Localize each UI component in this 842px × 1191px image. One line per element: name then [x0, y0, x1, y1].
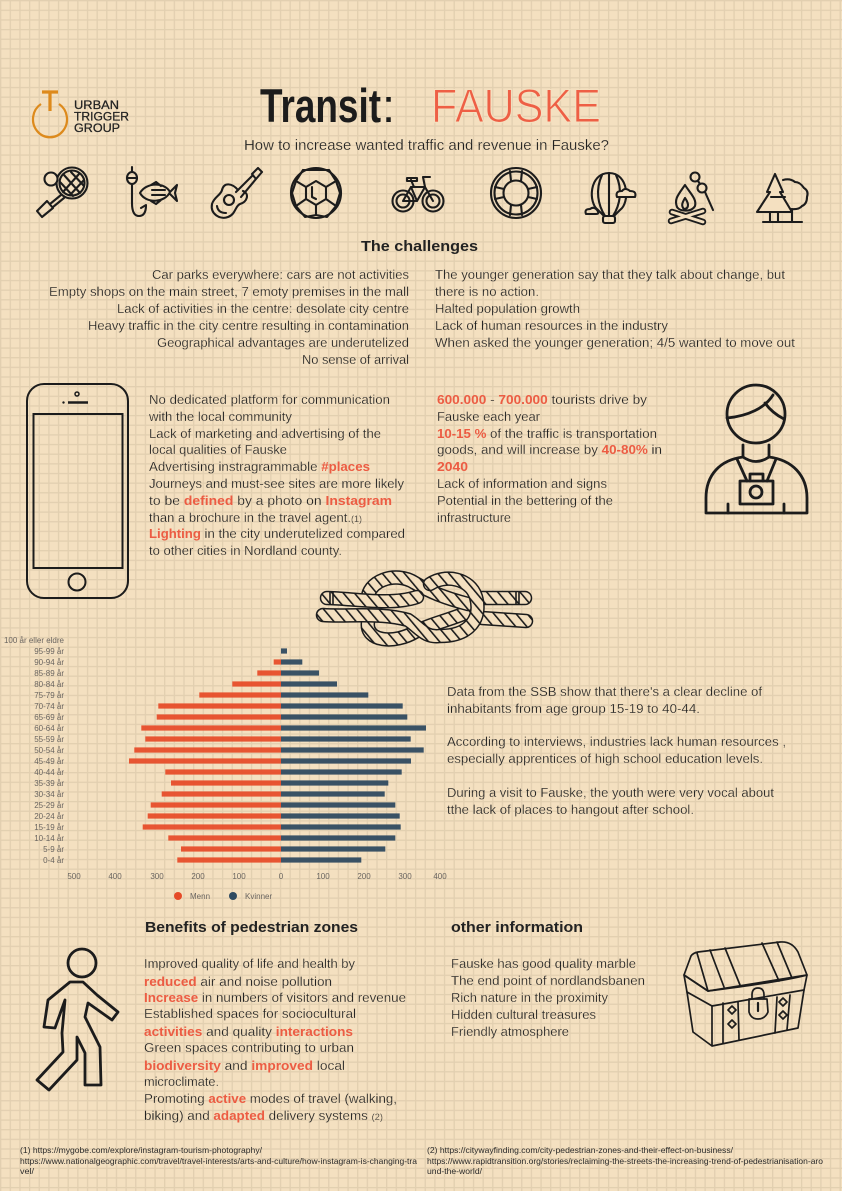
text block: communication: to be defined by a photo on Instagram [149, 493, 392, 508]
text block: challenges right: Lack of human resources in the industry [435, 318, 668, 333]
text block: tourists: 10-15 % of the traffic is transportation [437, 426, 657, 441]
age labels: 40-44 år [34, 768, 64, 777]
age labels: 45-49 år [34, 757, 64, 766]
icon: racket and ball [37, 168, 88, 217]
age labels: 100 år eller eldre [4, 636, 65, 645]
heading: other information: other information [451, 919, 583, 936]
logo: Urban Trigger Group [33, 92, 129, 137]
text block: communication: than a brochure in the travel agent.(1) [149, 510, 362, 525]
text block: challenges left: Lack of activities in the centre: desolate city centre [117, 301, 409, 316]
age labels: 30-34 år [34, 790, 64, 799]
footnotes: sources 1: vel/ [20, 1166, 35, 1176]
icon: pedestrian [37, 949, 118, 1090]
text block: challenges left: Empty shops on the main street, 7 emoty premises in the mall [49, 284, 409, 299]
value axis: 100 [232, 872, 246, 881]
text block: challenges right: Halted population growth [435, 301, 580, 316]
age labels: 65-69 år [34, 713, 64, 722]
value axis: 300 [150, 872, 164, 881]
value axis: 0 [279, 872, 284, 881]
text block: other information: Rich nature in the proximity [451, 990, 608, 1005]
text block: challenges left: Car parks everywhere: cars are not activities [152, 267, 410, 282]
age labels: 80-84 år [34, 680, 64, 689]
text block: challenges right: The younger generation say that they talk about change, but [435, 267, 785, 282]
text block: tourists: Fauske each year [437, 409, 541, 424]
footnotes: sources 2: https://www.rapidtransition.org/stories/reclaiming-the-streets-the-increasing-trend-of-pedestrianisation-aro [427, 1156, 823, 1166]
text block: communication: to other cities in Nordland county. [149, 543, 342, 558]
icon: bicycle [392, 177, 444, 212]
text block: challenges right: there is no action. [435, 284, 539, 299]
text block: challenges right [435, 267, 795, 350]
text block: communication: Journeys and must-see sites are more likely [149, 476, 404, 491]
heading: benefits of pedestrian zones: Benefits of pedestrian zones [145, 919, 358, 936]
text block: challenges left: No sense of arrival [302, 352, 409, 367]
text block: benefits: activities and quality interactions [144, 1024, 353, 1039]
age labels [4, 636, 65, 865]
heading: the challenges: The challenges [361, 238, 478, 255]
legend: Menn [190, 892, 210, 901]
title: Transit [260, 79, 381, 132]
icon: trees [757, 174, 808, 222]
icon: rope knot [323, 578, 526, 639]
text block: chart commentary: especially apprentices of high school education levels. [447, 751, 763, 766]
icon: smartphone [27, 384, 128, 598]
text block: chart commentary: tthe lack of places to hangout after school. [447, 802, 694, 817]
text block: tourists: Lack of information and signs [437, 476, 607, 491]
text block: other information: The end point of nordlandsbanen [451, 973, 645, 988]
logo: Urban Trigger Group: TRIGGER [74, 112, 129, 124]
text block: communication: Advertising instragrammable #places [149, 459, 370, 474]
text block: tourists: 2040 [437, 459, 468, 474]
text block: other information: Fauske has good quality marble [451, 956, 636, 971]
age labels: 0-4 år [43, 856, 64, 865]
age labels: 25-29 år [34, 801, 64, 810]
text block: benefits: Green spaces contributing to urban [144, 1040, 354, 1055]
text block: communication: local qualities of Fauske [149, 442, 287, 457]
chart: population pyramid [4, 636, 447, 901]
text block: benefits: Improved quality of life and health by [144, 956, 355, 971]
age labels: 60-64 år [34, 724, 64, 733]
icon: guitar [212, 168, 262, 218]
age labels: 95-99 år [34, 647, 64, 656]
value axis: 100 [316, 872, 330, 881]
age labels: 55-59 år [34, 735, 64, 744]
icon: football [291, 168, 341, 218]
text block: benefits: Established spaces for sociocultural [144, 1006, 356, 1021]
subtitle: How to increase wanted traffic and revenue in Fauske? [244, 138, 609, 154]
bars: women [281, 648, 426, 863]
text block: benefits [144, 956, 406, 1123]
text block: communication: No dedicated platform for communication [149, 392, 390, 407]
value axis: 200 [191, 872, 205, 881]
icon: fish and hook [127, 167, 177, 216]
text block: challenges right: When asked the younger generation; 4/5 wanted to move out [435, 335, 795, 350]
footnotes: sources 2 [427, 1145, 823, 1176]
footnotes: sources 1: (1) https://mygobe.com/explore/instagram-tourism-photography/ [20, 1145, 263, 1155]
legend [174, 892, 272, 901]
icon: tourist with camera [706, 385, 807, 513]
value axis: 500 [67, 872, 81, 881]
bars: men [129, 659, 281, 863]
age labels: 35-39 år [34, 779, 64, 788]
age labels: 50-54 år [34, 746, 64, 755]
value axis: 200 [357, 872, 371, 881]
icon: lifebuoy [491, 168, 541, 218]
text block: challenges left: Heavy traffic in the city centre resulting in contamination [88, 318, 409, 333]
value axis: 300 [398, 872, 412, 881]
value axis: 400 [433, 872, 447, 881]
text block: tourists [437, 392, 662, 525]
text block: benefits: microclimate. [144, 1074, 219, 1089]
icon: campfire and skewer [671, 172, 713, 222]
text block: communication: Lack of marketing and advertising of the [149, 426, 381, 441]
text block: benefits: reduced air and noise pollution [144, 974, 332, 989]
text block: benefits: biking) and adapted delivery systems (2) [144, 1108, 383, 1123]
text block: chart commentary: According to interviews, industries lack human resources , [447, 734, 786, 749]
text block: communication: Lighting in the city underutelized compared [149, 526, 405, 541]
text block: challenges left [49, 267, 410, 367]
age labels: 85-89 år [34, 669, 64, 678]
age labels: 70-74 år [34, 702, 64, 711]
title [260, 79, 601, 132]
icon: treasure chest [684, 942, 807, 1046]
text block: other information: Friendly atmosphere [451, 1024, 569, 1039]
age labels: 75-79 år [34, 691, 64, 700]
footnotes: sources 2: (2) https://citywayfinding.com/city-pedestrian-zones-and-their-effect-on-business/ [427, 1145, 734, 1155]
footnotes: sources 1 [20, 1145, 417, 1176]
text block: tourists: goods, and will increase by 40-80% in [437, 442, 662, 457]
footnotes: sources 2: und-the-world/ [427, 1166, 483, 1176]
age labels: 5-9 år [43, 845, 64, 854]
text block: tourists: Potential in the bettering of the [437, 493, 613, 508]
title: FAUSKE [431, 79, 601, 132]
legend: Kvinner [245, 892, 272, 901]
title: : [382, 79, 395, 132]
icon: hot air balloon [586, 173, 635, 223]
text block: communication [148, 392, 405, 558]
age labels: 90-94 år [34, 658, 64, 667]
text block: benefits: Increase in numbers of visitors and revenue [144, 990, 406, 1005]
text block: chart commentary [447, 684, 786, 817]
text block: communication: with the local community [148, 409, 292, 424]
text block: challenges left: Geographical advantages are underutelized [157, 335, 409, 350]
value axis: 400 [108, 872, 122, 881]
text block: chart commentary: Data from the SSB show that there's a clear decline of [447, 684, 762, 699]
logo: Urban Trigger Group: URBAN [74, 100, 119, 112]
value axis [67, 872, 447, 881]
logo: Urban Trigger Group: GROUP [74, 123, 120, 135]
age labels: 10-14 år [34, 834, 64, 843]
age labels: 20-24 år [34, 812, 64, 821]
text block: other information [451, 956, 645, 1039]
footnotes: sources 1: https://www.nationalgeographic.com/travel/travel-interests/arts-and-culture/how-instagram-is-changing-tra [20, 1156, 417, 1166]
text block: benefits: biodiversity and improved local [144, 1058, 345, 1073]
text block: benefits: Promoting active modes of travel (walking, [144, 1091, 397, 1106]
text block: tourists: infrastructure [437, 510, 511, 525]
icon row [37, 167, 808, 223]
text block: chart commentary: inhabitants from age group 15-19 to 40-44. [447, 701, 700, 716]
text block: other information: Hidden cultural treasures [451, 1007, 596, 1022]
text block: tourists: 600.000 - 700.000 tourists drive by [437, 392, 648, 407]
text block: chart commentary: During a visit to Fauske, the youth were very vocal about [447, 785, 774, 800]
age labels: 15-19 år [34, 823, 64, 832]
